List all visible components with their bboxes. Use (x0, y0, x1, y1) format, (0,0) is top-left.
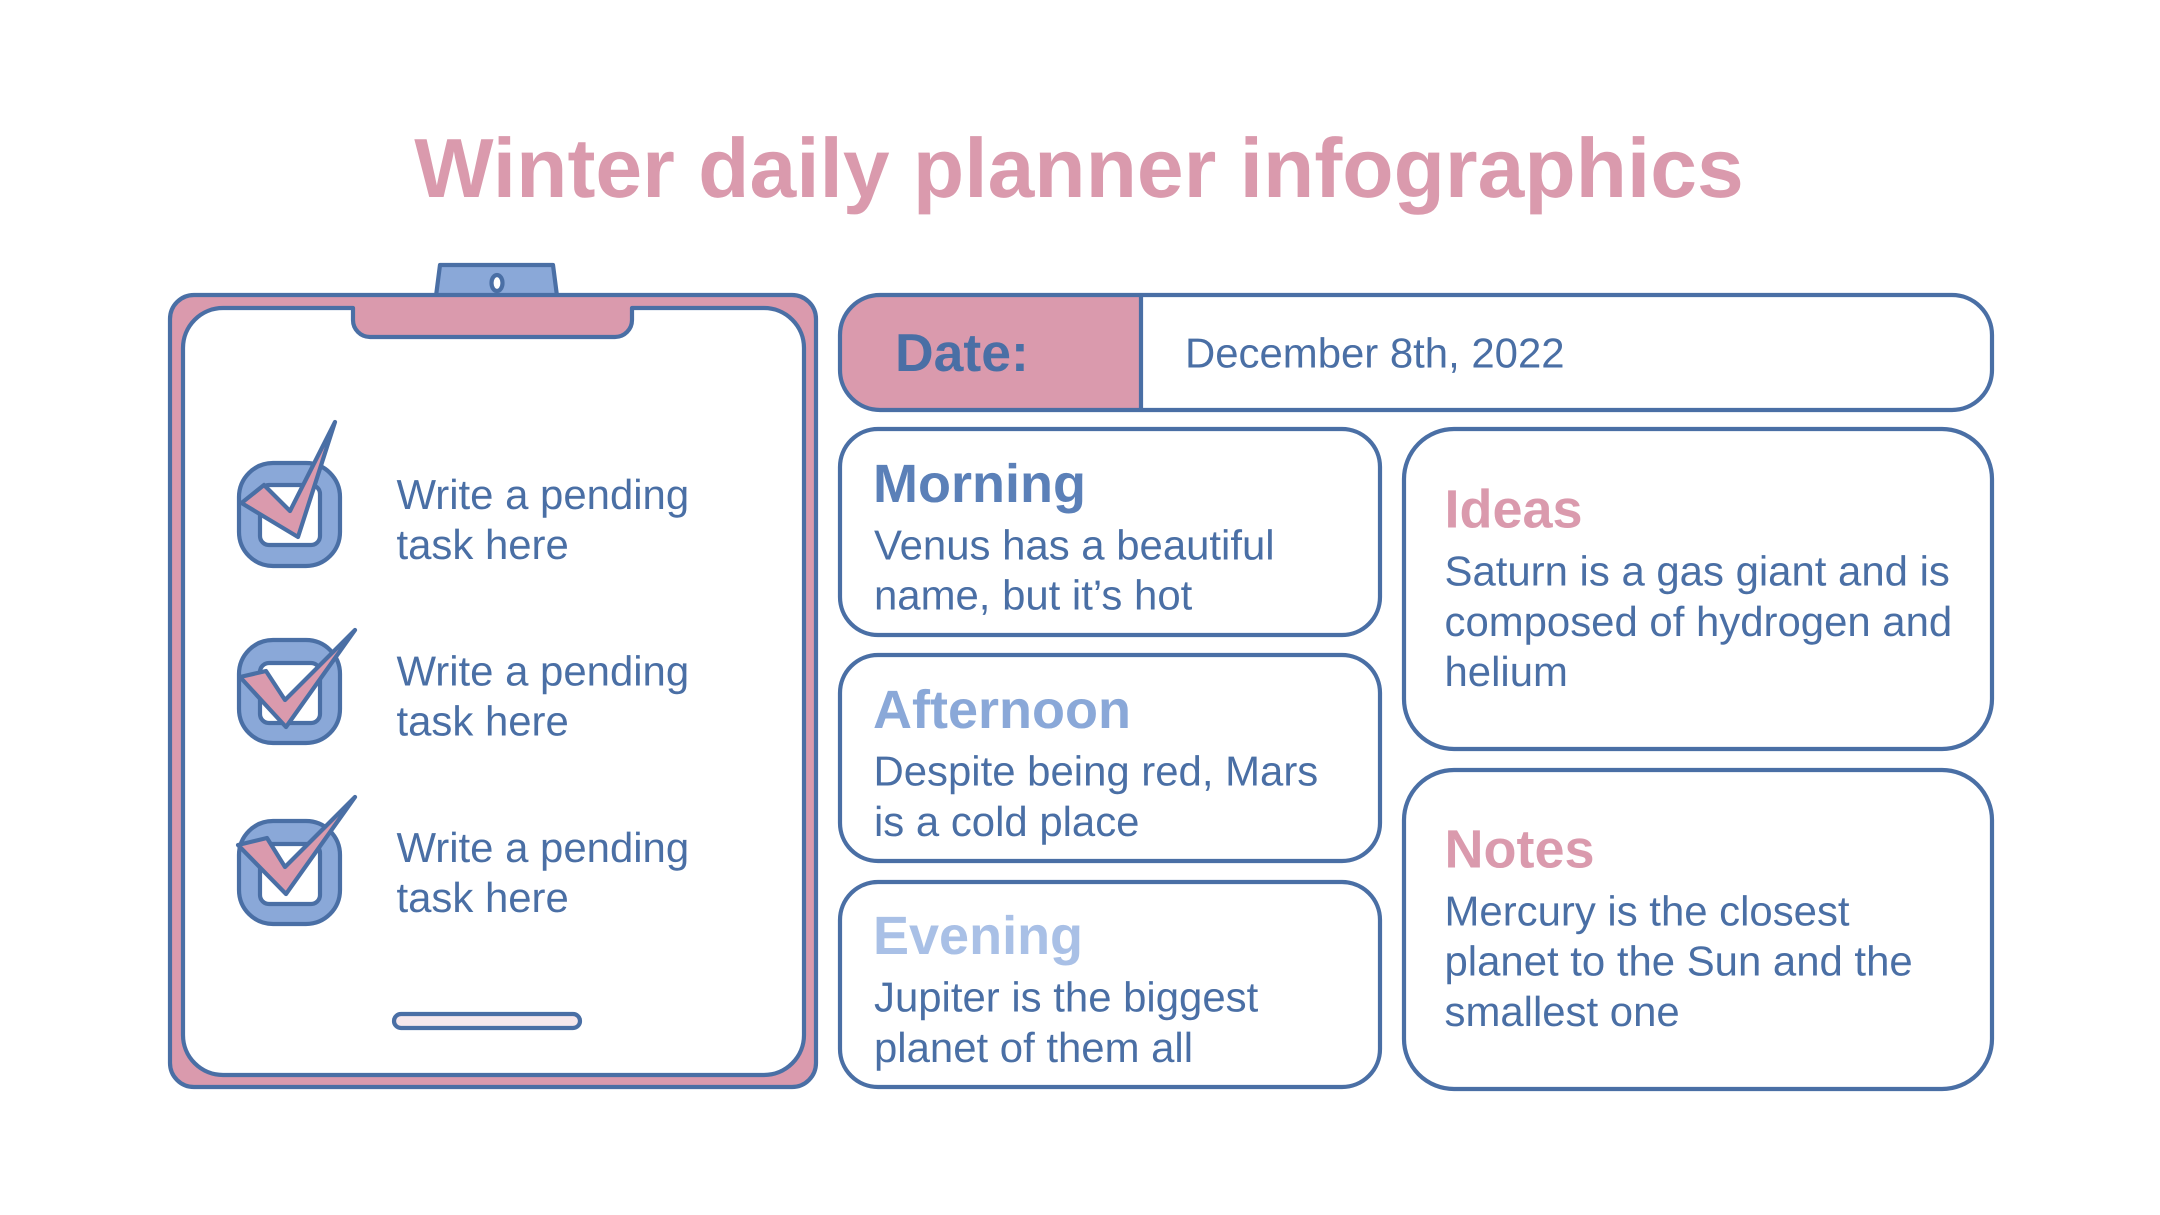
panel: evening (840, 882, 1380, 1087)
task 2 text: task here (396, 698, 569, 744)
panel: morning (840, 429, 1380, 635)
task 3 text (396, 824, 689, 921)
notes heading: Notes (1444, 820, 1595, 880)
title: Winter daily planner infographics (414, 121, 1744, 215)
ideas text: Saturn is a gas giant and is (1444, 548, 1950, 594)
evening text: Jupiter is the biggest (874, 974, 1259, 1020)
ideas text: composed of hydrogen and (1444, 598, 1952, 645)
evening text: planet of them all (874, 1024, 1193, 1071)
clipboard clip top (436, 265, 557, 296)
clipboard paper sheet (183, 308, 804, 1075)
ideas text: helium (1444, 648, 1568, 695)
date label: Date: (895, 324, 1029, 383)
date label background (840, 295, 1141, 410)
task 1 text (396, 471, 689, 568)
morning text: name, but it’s hot (874, 572, 1193, 618)
notes text: smallest one (1444, 988, 1680, 1035)
task 1 checkbox icon (239, 422, 340, 566)
afternoon text: Despite being red, Mars (874, 748, 1318, 794)
date bar outline (840, 295, 1992, 410)
task 3 text: task here (396, 874, 569, 921)
afternoon text: is a cold place (874, 798, 1139, 845)
ideas text (1444, 548, 1952, 695)
panel: clipboard (170, 265, 816, 1087)
panel: notes (1404, 770, 1992, 1089)
task 3 checkbox icon (238, 797, 355, 924)
clipboard board (170, 295, 816, 1087)
morning text: Venus has a beautiful (874, 522, 1275, 568)
notes text: Mercury is the closest (1444, 888, 1850, 934)
task 2 text (396, 648, 689, 744)
task 1 text: Write a pending (396, 471, 689, 518)
afternoon heading: Afternoon (873, 680, 1131, 740)
ideas heading: Ideas (1444, 480, 1583, 540)
panel: afternoon (840, 655, 1380, 861)
panel: ideas (1404, 429, 1992, 749)
date value: December 8th, 2022 (1185, 330, 1565, 376)
notes text: planet to the Sun and the (1444, 938, 1913, 984)
task 2 checkbox icon (239, 630, 355, 743)
notes text (1444, 888, 1913, 1035)
evening text (874, 974, 1259, 1071)
task 3 text: Write a pending (396, 824, 689, 871)
panel: date bar (840, 295, 1992, 410)
morning text (874, 522, 1275, 618)
date divider (1139, 295, 1143, 410)
clipboard bottom bar (394, 1014, 580, 1028)
evening heading: Evening (873, 906, 1083, 966)
task 2 text: Write a pending (396, 648, 689, 694)
morning heading: Morning (873, 454, 1086, 514)
task 1 text: task here (396, 521, 569, 568)
afternoon text (874, 748, 1318, 845)
